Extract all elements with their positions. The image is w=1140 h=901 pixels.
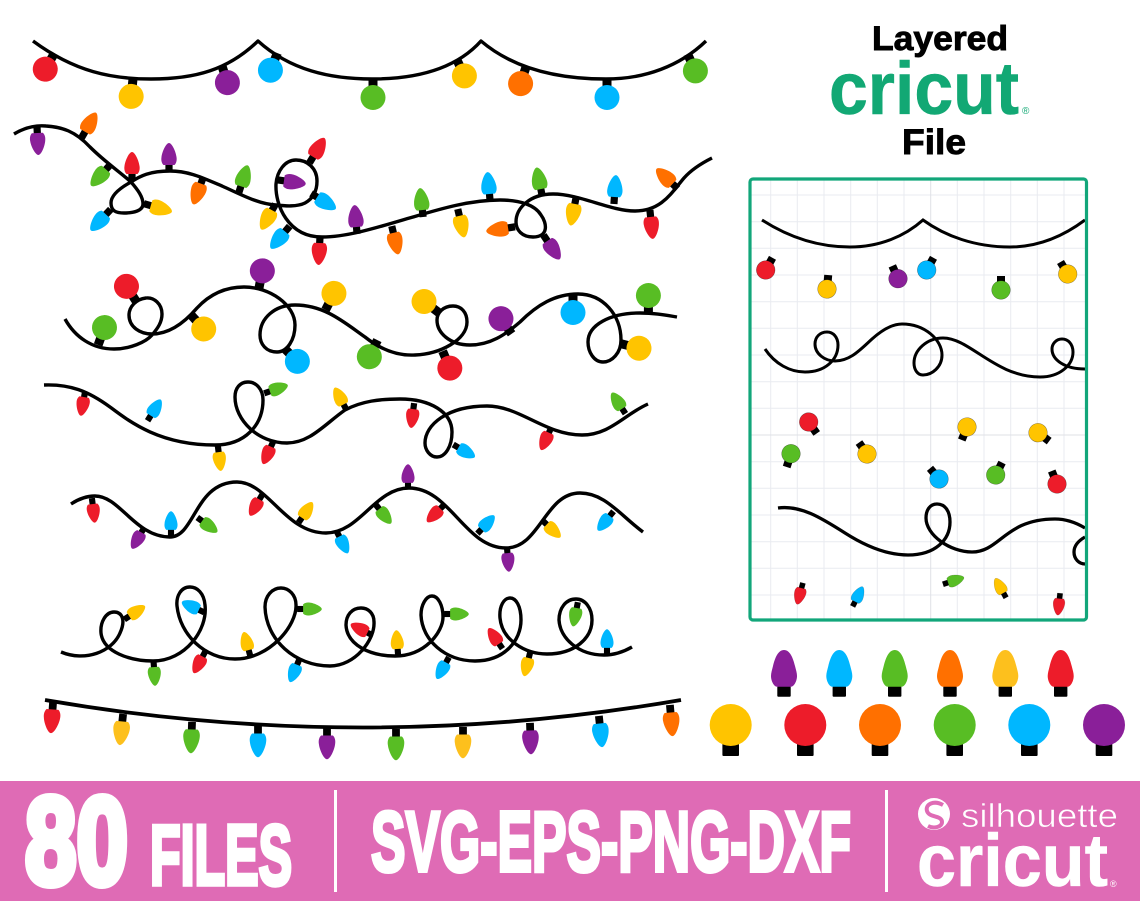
registered mark: ® [1110,879,1117,889]
string 7 bulbs [43,701,681,760]
light string 5: pointed bulbs, wavy [71,464,643,572]
string 6 bulbs [121,596,614,686]
legend: single round bulbs [710,704,1125,756]
mat border [750,179,1086,620]
separated round bulbs on the mat [753,253,1080,496]
silhouette swirl icon [918,798,950,830]
footer banner [0,773,1140,901]
divider [334,790,337,892]
light string 4: pointed bulbs, wavy [44,379,648,472]
heading: Layered Cricut File [829,20,1030,162]
heading line: Layered: Layered [872,20,1008,58]
mat grid [751,180,1085,619]
separated pointed bulbs on the mat [792,572,1066,616]
legend: single pointed bulbs [771,650,1074,697]
string 5 bulbs [85,464,619,572]
string 2 bulbs [29,109,683,265]
files label: FILES [150,808,292,901]
string 3 wire [65,287,677,362]
string 1 wire [33,41,706,79]
light string 7: long bulbs on shallow curve [43,700,681,760]
string 3 bulbs [86,256,661,384]
string 7 wire [45,700,681,728]
divider [885,790,888,892]
banner background [0,781,1140,901]
string 6 wire [61,587,632,666]
panel: cricut mat preview [750,179,1086,620]
string 5 wire [71,482,643,548]
string 4 bulbs [74,379,631,472]
light string 1: round bulbs, scalloped [28,41,712,110]
registered mark: ® [1022,106,1030,117]
light string 6: pointed bulbs with many loops [61,587,632,686]
string 2 wire [14,126,712,237]
cricut wordmark green: cricut [829,47,1019,130]
light string 3: round bulbs with loops [65,256,677,384]
string 4 wire [44,382,648,457]
string 1 bulbs [28,47,712,110]
light string 2: pointed bulbs with loops [14,109,712,265]
cricut wordmark white: cricut [917,819,1108,901]
silhouette logo [918,797,1118,834]
heading line: File: File [902,123,966,162]
separated wires on the mat [762,220,1085,564]
silhouette wordmark: silhouette [961,797,1118,834]
